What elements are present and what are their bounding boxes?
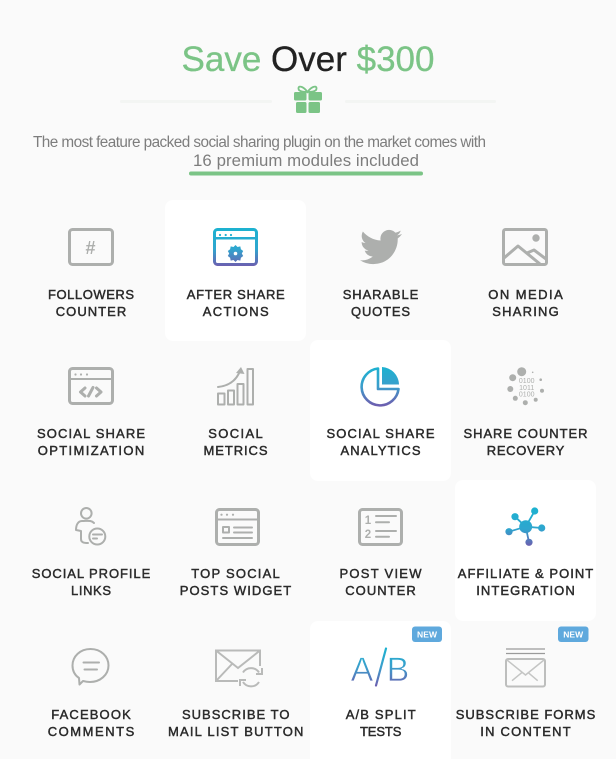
label: LINKS — [71, 583, 111, 598]
icon: binary dots: 1011 — [519, 385, 534, 392]
label: OPTIMIZATION — [38, 443, 144, 458]
panel: social metrics — [204, 367, 268, 458]
title: Save Over $300 — [182, 40, 434, 79]
label: AFTER SHARE — [187, 287, 285, 302]
panel: share counter recovery — [464, 367, 588, 458]
label: INTEGRATION — [476, 583, 575, 598]
subtitle — [33, 134, 486, 170]
label — [346, 707, 416, 739]
label: COMMENTS — [48, 724, 135, 739]
icon: envelope with refresh — [216, 650, 262, 686]
label: COUNTER — [345, 583, 416, 598]
panel: post view counter — [340, 510, 422, 598]
icon: A/B: B — [387, 651, 409, 689]
icon: network nodes — [505, 507, 545, 546]
icon: browser widget — [216, 510, 259, 544]
label — [204, 426, 268, 458]
icon: speech bubble — [72, 649, 108, 684]
icon: hash box: # — [85, 238, 96, 258]
label: SUBSCRIBE FORMS — [456, 707, 596, 722]
highlight card — [310, 340, 451, 481]
panel: social share analytics — [310, 340, 451, 481]
label: SOCIAL SHARE — [326, 426, 435, 441]
icon: browser gear — [214, 230, 257, 264]
panel: sharable quotes — [343, 230, 419, 319]
label: COUNTER — [56, 304, 126, 319]
icon: numbered list: 1 — [365, 515, 372, 527]
label: A/B SPLIT — [346, 707, 416, 722]
panel: social profile links — [32, 508, 151, 598]
label — [48, 707, 135, 739]
label — [340, 566, 422, 598]
panel: a/b split tests — [310, 621, 451, 759]
label — [32, 566, 151, 598]
label — [168, 707, 303, 739]
label: POSTS WIDGET — [180, 583, 291, 598]
panel: subscribe to mail list button — [168, 650, 303, 739]
label — [488, 287, 563, 319]
panel: social share optimization — [37, 368, 145, 458]
label: TESTS — [360, 724, 402, 739]
new badge — [412, 626, 442, 642]
icon: binary dots: 0100 — [519, 378, 535, 385]
icon: binary dots — [507, 367, 544, 405]
panel: affiliate and point integration — [455, 480, 596, 621]
label: SOCIAL — [208, 426, 263, 441]
label: SHARE COUNTER — [464, 426, 588, 441]
icon: envelope with lines — [506, 649, 545, 686]
subtitle underline — [189, 172, 423, 176]
subtitle: The most feature packed social sharing plugin on the market comes with — [33, 134, 486, 151]
label: POST VIEW — [340, 566, 422, 581]
label: FOLLOWERS — [48, 287, 134, 302]
icon: A/B: A — [351, 651, 374, 689]
icon: gift — [294, 87, 322, 113]
label: ACTIONS — [203, 304, 269, 319]
label: ON MEDIA — [488, 287, 563, 302]
panel: facebook comments — [48, 649, 135, 739]
subtitle: 16 premium modules included — [193, 151, 419, 170]
label: SOCIAL SHARE — [37, 426, 145, 441]
highlight card — [165, 200, 306, 341]
label — [456, 707, 596, 739]
label: SHARABLE — [343, 287, 419, 302]
label — [187, 287, 285, 319]
panel: followers counter — [48, 230, 134, 319]
label: FACEBOOK — [51, 707, 131, 722]
label: TOP SOCIAL — [191, 566, 280, 581]
icon: twitter bird — [360, 230, 402, 264]
panel: subscribe forms in content — [456, 626, 596, 739]
panel: on media sharing — [488, 230, 563, 319]
icon: bar chart with arrow — [218, 367, 253, 404]
label — [180, 566, 291, 598]
label: SHARING — [492, 304, 559, 319]
label: METRICS — [204, 443, 268, 458]
icon: A/B — [351, 648, 409, 689]
label: QUOTES — [351, 304, 410, 319]
highlight card — [310, 621, 451, 759]
label: IN CONTENT — [480, 724, 571, 739]
label — [48, 287, 134, 319]
icon: numbered list — [360, 510, 402, 544]
panel: top social posts widget — [180, 510, 291, 598]
label: MAIL LIST BUTTON — [168, 724, 303, 739]
label: SUBSCRIBE TO — [182, 707, 289, 722]
label — [37, 426, 145, 458]
icon: pie chart — [362, 367, 399, 405]
icon: image — [504, 230, 546, 264]
label — [464, 426, 588, 458]
panel: after share actions — [165, 200, 306, 341]
icon: numbered list: 2 — [365, 529, 371, 541]
label: SOCIAL PROFILE — [32, 566, 151, 581]
highlight card — [455, 480, 596, 621]
icon: person with speech bubble — [76, 508, 105, 544]
icon: browser code — [69, 368, 113, 404]
label — [343, 287, 419, 319]
label: AFFILIATE & POINT — [458, 566, 593, 581]
icon: binary dots: 0100 — [519, 392, 535, 398]
new badge: NEW — [417, 630, 438, 640]
new badge: NEW — [563, 630, 584, 640]
label: RECOVERY — [487, 443, 565, 458]
label — [326, 426, 435, 458]
label: ANALYTICS — [340, 443, 421, 458]
label — [458, 566, 593, 598]
